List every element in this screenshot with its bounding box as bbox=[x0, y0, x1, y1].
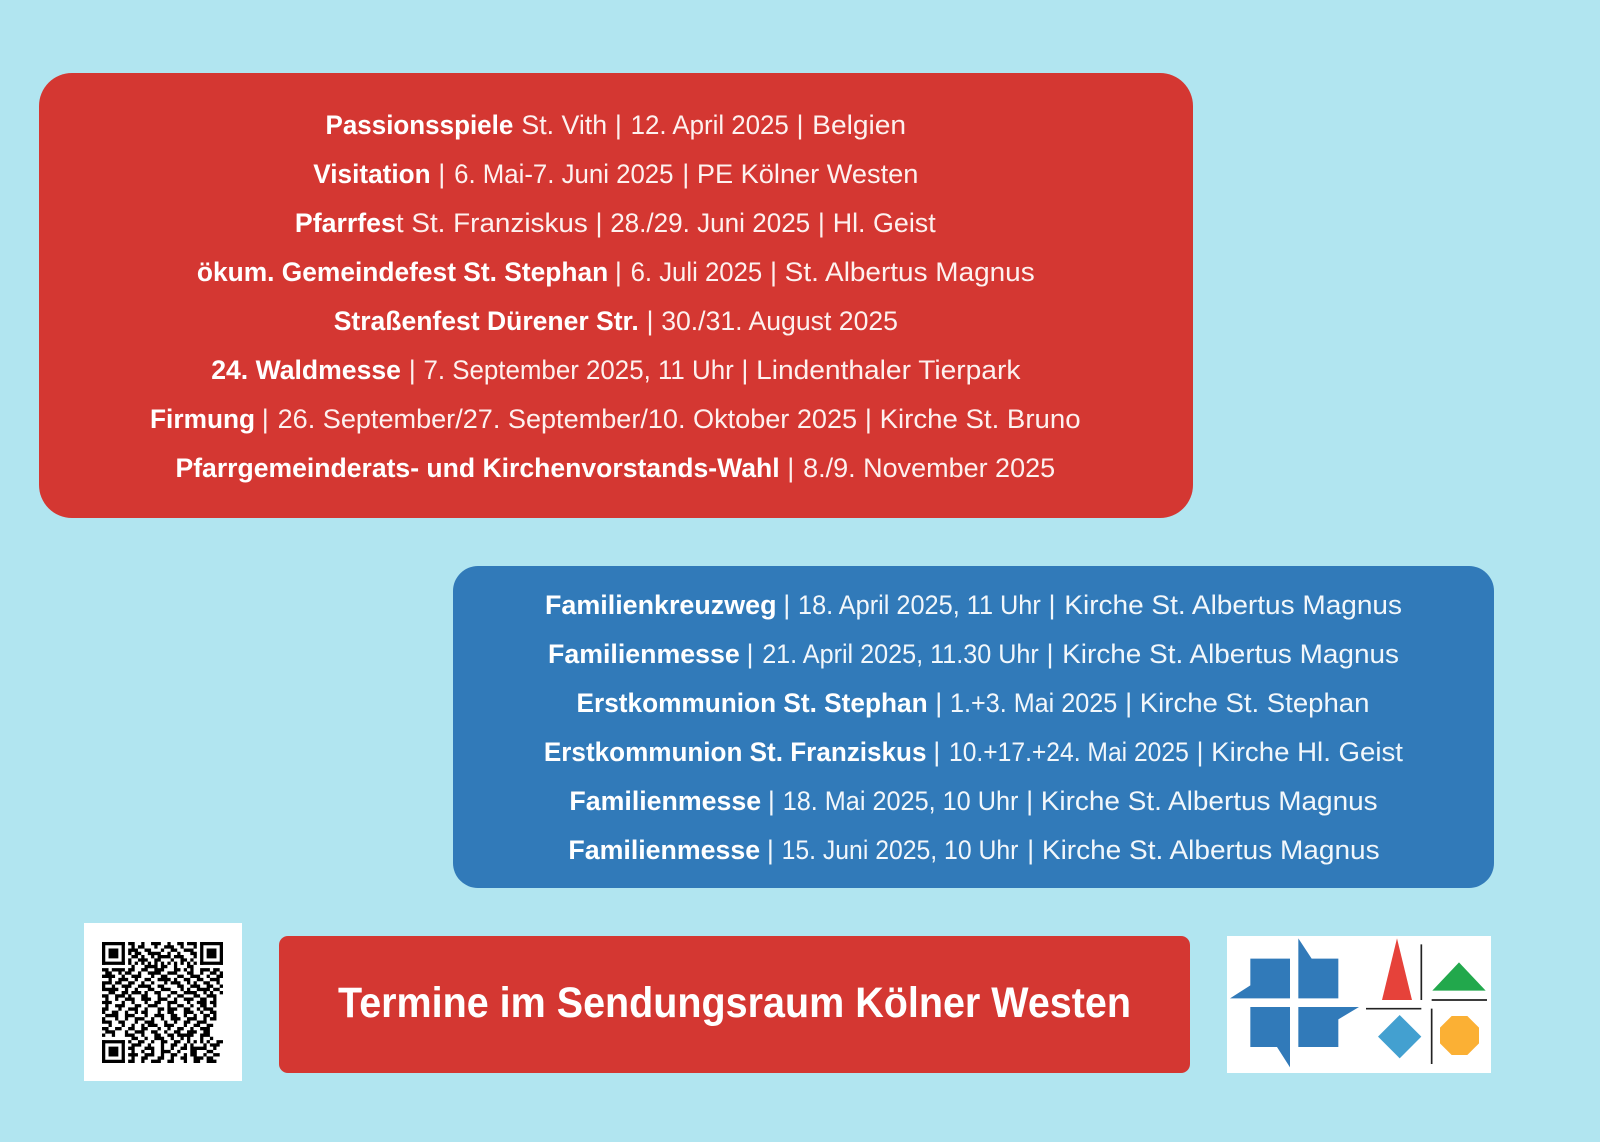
family line: Familienmesse Mai: Familienmesse bbox=[569, 786, 761, 816]
family line: Erstkommunion St. Franziskus: Erstkommunion St. Franziskus bbox=[544, 737, 926, 767]
logo: green triangle bbox=[1432, 962, 1486, 991]
family line: Familienmesse Juni: Kirche St. Albertus Magnus bbox=[1042, 835, 1380, 865]
family line: Familienmesse April: | bbox=[746, 639, 754, 669]
event line: Wahl: | bbox=[787, 453, 794, 483]
event line: Waldmesse: 24. Waldmesse bbox=[211, 355, 401, 385]
event line: Passionsspiele: St. Vith bbox=[521, 110, 607, 140]
family line: Familienmesse Juni: 15. Juni 2025, 10 Uhr bbox=[782, 835, 1018, 865]
family line: Erstkommunion St. Franziskus: | bbox=[933, 737, 940, 767]
event line: Waldmesse: | bbox=[741, 355, 748, 385]
logo: red triangle bbox=[1382, 938, 1412, 1000]
event line: Pfarrfest: Pfarrfes bbox=[295, 208, 396, 238]
family line: Familienmesse Mai: | bbox=[1026, 786, 1033, 816]
event line: Waldmesse bbox=[211, 355, 1021, 385]
event line: Straßenfest bbox=[334, 306, 898, 336]
event line: Passionsspiele: 12. April 2025 bbox=[631, 110, 789, 140]
event line: Firmung bbox=[150, 404, 1081, 434]
event line: Gemeindefest: St. Albertus Magnus bbox=[785, 257, 1035, 287]
event line: Straßenfest: Straßenfest Dürener Str. bbox=[334, 306, 639, 336]
event line: Gemeindefest: | bbox=[770, 257, 777, 287]
QR code bbox=[84, 923, 242, 1081]
event line: Visitation: 6. Mai-7. Juni 2025 bbox=[454, 159, 674, 189]
title: Termine im Sendungsraum Kölner Westen bbox=[338, 979, 1131, 1027]
family line: Erstkommunion St. Stephan: 1.+3. Mai 2025 bbox=[950, 688, 1117, 718]
event line: Pfarrfest: | bbox=[818, 208, 825, 238]
event line: Waldmesse: | bbox=[409, 355, 416, 385]
family line: Familienmesse Mai: Kirche St. Albertus Magnus bbox=[1041, 786, 1378, 816]
event line: Passionsspiele: | bbox=[796, 110, 804, 140]
family line: Familienkreuzweg bbox=[545, 590, 1402, 620]
panel: blue family event list bbox=[453, 566, 1494, 888]
family line: Erstkommunion St. Stephan bbox=[576, 688, 1369, 718]
event line: Pfarrfest: | bbox=[595, 208, 603, 238]
event line: Straßenfest: | bbox=[646, 306, 654, 336]
event line: Wahl: Pfarrgemeinderats- und Kirchenvorstands-Wahl bbox=[176, 453, 780, 483]
event line: Firmung: Kirche St. Bruno bbox=[880, 404, 1081, 434]
logo: orange octagon bbox=[1440, 1016, 1479, 1055]
family line: Familienmesse Mai: | bbox=[768, 786, 775, 816]
family line: Familienmesse April bbox=[548, 639, 1399, 669]
event line: Passionsspiele: | bbox=[615, 110, 622, 140]
event line: Gemeindefest: | bbox=[615, 257, 622, 287]
family line: Erstkommunion St. Stephan: Kirche St. Stephan bbox=[1140, 688, 1369, 718]
event line: Pfarrfest bbox=[295, 208, 936, 238]
event line: Wahl bbox=[176, 453, 1055, 483]
event line: Wahl: 8./9. November 2025 bbox=[803, 453, 1055, 483]
event line: Pfarrfest: 28./29. Juni 2025 bbox=[610, 208, 810, 238]
event line: Waldmesse: Lindenthaler Tierpark bbox=[756, 355, 1021, 385]
family line: Erstkommunion St. Stephan: | bbox=[1125, 688, 1132, 718]
family line: Erstkommunion St. Stephan: Erstkommunion St. Stephan bbox=[576, 688, 928, 718]
event line: Firmung: Firmung bbox=[150, 404, 255, 434]
event line: Passionsspiele: Passionsspiele bbox=[326, 110, 513, 140]
family line: Familienmesse Mai: 18. Mai 2025, 10 Uhr bbox=[783, 786, 1018, 816]
family line: Erstkommunion St. Franziskus: Kirche Hl. Geist bbox=[1211, 737, 1403, 767]
family line: Erstkommunion St. Stephan: | bbox=[935, 688, 942, 718]
family line: Erstkommunion St. Franziskus: | bbox=[1196, 737, 1204, 767]
event line: Visitation: Visitation bbox=[313, 159, 431, 189]
family line: Familienmesse Mai bbox=[569, 786, 1378, 816]
family line: Erstkommunion St. Franziskus bbox=[544, 737, 1403, 767]
family line: Familienkreuzweg: | bbox=[783, 590, 790, 620]
family line: Familienkreuzweg: 18. April 2025, 11 Uhr bbox=[798, 590, 1041, 620]
event line: Visitation: | bbox=[438, 159, 445, 189]
event line: Pfarrfest: t St. Franziskus bbox=[396, 208, 588, 238]
event line: Passionsspiele: Belgien bbox=[812, 110, 906, 140]
logo: blue diamond bbox=[1378, 1015, 1421, 1058]
family line: Familienmesse Juni: | bbox=[1027, 835, 1034, 865]
event line: Passionsspiele bbox=[326, 110, 906, 140]
family line: Familienmesse April: | bbox=[1046, 639, 1054, 669]
event line: Waldmesse: 7. September 2025, 11 Uhr bbox=[424, 355, 734, 385]
event line: Pfarrfest: Hl. Geist bbox=[833, 208, 936, 238]
panel: red event list bbox=[39, 73, 1193, 518]
family line: Familienmesse April: Familienmesse bbox=[548, 639, 740, 669]
family line: Familienkreuzweg: Kirche St. Albertus Magnus bbox=[1064, 590, 1402, 620]
family line: Familienmesse Juni bbox=[568, 835, 1380, 865]
family line: Familienmesse April: 21. April 2025, 11.30 Uhr bbox=[762, 639, 1039, 669]
family line: Familienmesse Juni: | bbox=[767, 835, 774, 865]
logo: blue cross of speech bubbles bbox=[1230, 938, 1359, 1067]
event line: Gemeindefest: 6. Juli 2025 bbox=[631, 257, 762, 287]
event line: Gemeindefest: ökum. Gemeindefest St. Stephan bbox=[197, 257, 608, 287]
family line: Familienkreuzweg: Familienkreuzweg bbox=[545, 590, 776, 620]
event line: Visitation: PE Kölner Westen bbox=[697, 159, 918, 189]
family line: Familienmesse April: Kirche St. Albertus Magnus bbox=[1062, 639, 1399, 669]
family line: Familienkreuzweg: | bbox=[1048, 590, 1056, 620]
event line: Straßenfest: 30./31. August 2025 bbox=[661, 306, 898, 336]
logo bbox=[1227, 936, 1491, 1073]
family line: Erstkommunion St. Franziskus: 10.+17.+24. Mai 2025 bbox=[949, 737, 1189, 767]
event line: Firmung: 26. September/27. September/10. Oktober 2025 bbox=[278, 404, 857, 434]
event line: Visitation: | bbox=[682, 159, 689, 189]
event line: Gemeindefest bbox=[197, 257, 1035, 287]
event line: Visitation bbox=[313, 159, 918, 189]
title bar bbox=[279, 936, 1190, 1073]
family line: Familienmesse Juni: Familienmesse bbox=[568, 835, 760, 865]
event line: Firmung: | bbox=[262, 404, 269, 434]
event line: Firmung: | bbox=[865, 404, 872, 434]
